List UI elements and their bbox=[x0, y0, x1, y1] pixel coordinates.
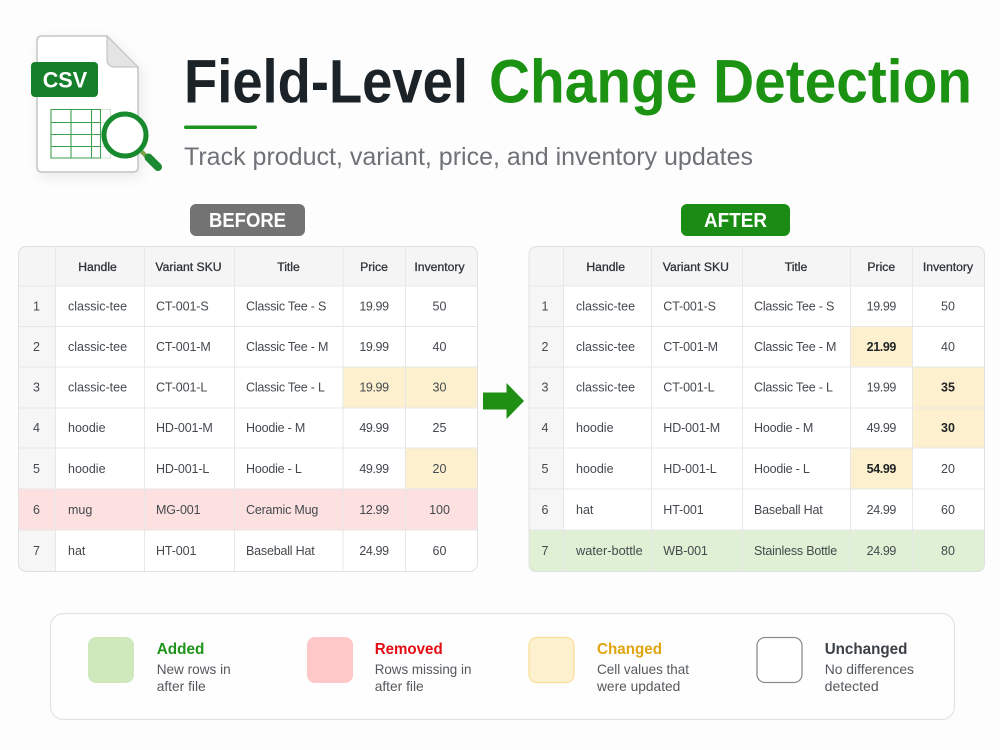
table: before: 60 bbox=[433, 544, 446, 558]
table: after: 5 bbox=[542, 462, 549, 476]
table: before: hoodie bbox=[68, 421, 106, 435]
table: before: CT-001-L bbox=[156, 380, 207, 394]
table: after: CT-001-M bbox=[663, 340, 718, 354]
table: after: classic-tee bbox=[576, 340, 635, 354]
table: before: Variant SKU bbox=[155, 260, 222, 274]
added row highlight bbox=[528, 530, 985, 572]
table: after: 35 bbox=[941, 380, 955, 394]
title: Change Detection bbox=[489, 47, 972, 115]
legend: changed: were updated bbox=[596, 678, 680, 694]
table: after: 6 bbox=[542, 503, 549, 517]
table: after: Inventory bbox=[923, 260, 974, 274]
table: after: Classic Tee - L bbox=[754, 380, 833, 394]
table: after: hoodie bbox=[576, 462, 614, 476]
table: before: mug bbox=[68, 503, 92, 517]
changed cells bbox=[850, 326, 985, 489]
legend: unchanged bbox=[757, 638, 914, 694]
table: after: 1 bbox=[542, 300, 549, 314]
table: after: 7 bbox=[542, 544, 549, 558]
table: before: Handle bbox=[78, 260, 117, 274]
table: before bbox=[18, 246, 478, 572]
table: before: Title bbox=[277, 260, 300, 274]
table: after: 21.99 bbox=[867, 340, 896, 354]
table: after: classic-tee bbox=[576, 380, 635, 394]
table: before: 4 bbox=[33, 421, 40, 435]
legend: removed: Removed bbox=[375, 641, 443, 658]
table: after: 49.99 bbox=[867, 421, 896, 435]
table: after: 50 bbox=[941, 300, 955, 314]
legend: removed: Rows missing in bbox=[375, 661, 471, 677]
table: before: MG-001 bbox=[156, 503, 201, 517]
table: after: Stainless Bottle bbox=[754, 544, 837, 558]
legend: added bbox=[88, 637, 231, 694]
legend: unchanged: detected bbox=[825, 678, 879, 694]
removed row highlight bbox=[18, 489, 478, 530]
table: before: 40 bbox=[433, 340, 446, 354]
table: after: hat bbox=[576, 503, 594, 517]
table: before: 30 bbox=[433, 380, 446, 394]
legend: unchanged: Unchanged bbox=[825, 641, 907, 658]
table: after: HD-001-M bbox=[663, 421, 720, 435]
table: after: 4 bbox=[542, 421, 549, 435]
badge: BEFORE: BEFORE bbox=[209, 210, 286, 232]
table: before: classic-tee bbox=[68, 300, 127, 314]
table: after: Variant SKU bbox=[663, 260, 729, 274]
legend: removed: after file bbox=[375, 678, 424, 694]
table: after: 2 bbox=[542, 340, 549, 354]
table: before: 49.99 bbox=[359, 421, 389, 435]
arrow: before to after bbox=[483, 383, 524, 419]
legend: added: after file bbox=[157, 678, 206, 694]
table: before: 7 bbox=[33, 544, 40, 558]
table: before: Classic Tee - M bbox=[246, 340, 328, 354]
badge: AFTER bbox=[681, 204, 790, 236]
table: before: 19.99 bbox=[359, 380, 389, 394]
table: after: 24.99 bbox=[867, 503, 896, 517]
table: after: Handle bbox=[586, 260, 625, 274]
table: before: Hoodie - M bbox=[246, 421, 305, 435]
table: after: Hoodie - M bbox=[754, 421, 813, 435]
table: after: 20 bbox=[941, 462, 955, 476]
table: before: classic-tee bbox=[68, 380, 127, 394]
table: before: 3 bbox=[33, 380, 40, 394]
badge: AFTER: AFTER bbox=[704, 210, 768, 232]
table: after: water-bottle bbox=[575, 544, 643, 558]
table: after: CT-001-L bbox=[663, 380, 715, 394]
table: before: 20 bbox=[433, 462, 446, 476]
panel: legend bbox=[50, 614, 954, 720]
table: before: Inventory bbox=[414, 260, 465, 274]
table: before: Baseball Hat bbox=[246, 544, 315, 558]
badge: BEFORE bbox=[190, 204, 305, 236]
table: before: 12.99 bbox=[359, 503, 389, 517]
table: after: Baseball Hat bbox=[754, 503, 823, 517]
table: after: 30 bbox=[941, 421, 955, 435]
table: before: Classic Tee - L bbox=[246, 380, 325, 394]
table: after: 19.99 bbox=[867, 300, 896, 314]
table: after: HT-001 bbox=[663, 503, 704, 517]
legend: added: New rows in bbox=[157, 661, 231, 677]
table: after: 54.99 bbox=[867, 462, 896, 476]
table: before: Hoodie - L bbox=[246, 462, 302, 476]
table: before: 50 bbox=[433, 300, 446, 314]
table: after: Title bbox=[785, 260, 808, 274]
legend: unchanged: No differences bbox=[825, 661, 914, 677]
legend: changed: Cell values that bbox=[597, 661, 689, 677]
changed cells bbox=[343, 367, 478, 489]
table: before: Price bbox=[360, 260, 388, 274]
table: before: hat bbox=[68, 544, 86, 558]
table: after bbox=[528, 246, 985, 572]
table: before: CT-001-S bbox=[156, 300, 209, 314]
table: after: CT-001-S bbox=[663, 300, 716, 314]
table: before: Classic Tee - S bbox=[246, 300, 326, 314]
legend: added: Added bbox=[157, 641, 204, 658]
table: before: 100 bbox=[429, 503, 450, 517]
table: after: 80 bbox=[941, 544, 955, 558]
table: after: HD-001-L bbox=[663, 462, 717, 476]
table: after: hoodie bbox=[576, 421, 614, 435]
table: after: Classic Tee - S bbox=[754, 300, 834, 314]
legend: changed bbox=[529, 638, 689, 694]
table: before: 6 bbox=[33, 503, 40, 517]
table: before: 24.99 bbox=[359, 544, 389, 558]
legend: removed bbox=[307, 637, 471, 694]
table: before: 5 bbox=[33, 462, 40, 476]
title underline bbox=[184, 126, 257, 129]
subtitle: Track product, variant, price, and inventory updates bbox=[184, 143, 753, 171]
table: before: 49.99 bbox=[359, 462, 389, 476]
table: before: classic-tee bbox=[68, 340, 127, 354]
table: before: 19.99 bbox=[359, 340, 389, 354]
table: before: hoodie bbox=[68, 462, 106, 476]
table: after: Classic Tee - M bbox=[754, 340, 836, 354]
icon: CSV file with magnifier bbox=[31, 36, 158, 172]
title bbox=[184, 47, 972, 115]
table: after: 19.99 bbox=[867, 380, 896, 394]
table: before: HD-001-L bbox=[156, 462, 209, 476]
legend: changed: Changed bbox=[597, 641, 662, 658]
table: after: Price bbox=[867, 260, 895, 274]
table: after: WB-001 bbox=[663, 544, 708, 558]
table: after: 60 bbox=[941, 503, 955, 517]
table: after: classic-tee bbox=[576, 300, 635, 314]
table: after: 3 bbox=[542, 380, 549, 394]
table: after: 40 bbox=[941, 340, 955, 354]
table: before: 19.99 bbox=[359, 300, 389, 314]
table: before: CT-001-M bbox=[156, 340, 211, 354]
table: before: HT-001 bbox=[156, 544, 196, 558]
table: before: 25 bbox=[433, 421, 446, 435]
table: before: 1 bbox=[33, 300, 40, 314]
table: before: Ceramic Mug bbox=[246, 503, 318, 517]
table: before: 2 bbox=[33, 340, 40, 354]
table: before: HD-001-M bbox=[156, 421, 213, 435]
table: after: 24.99 bbox=[867, 544, 896, 558]
title: Field-Level bbox=[184, 47, 468, 115]
table: after: Hoodie - L bbox=[754, 462, 810, 476]
icon: CSV file with magnifier: CSV bbox=[43, 68, 88, 92]
